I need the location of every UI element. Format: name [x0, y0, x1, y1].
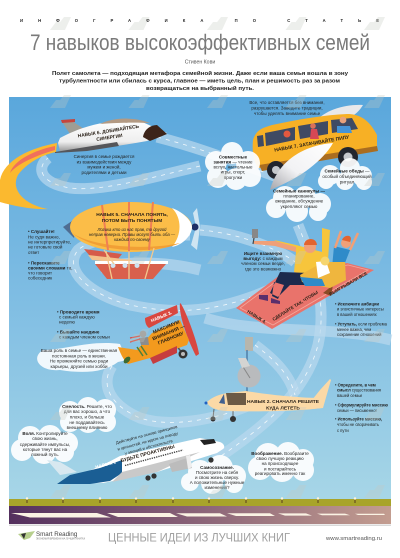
skill 4 bullets: и эгоистичные интересы	[337, 306, 384, 312]
skill 4 bullets: сохранение отношений	[337, 332, 381, 337]
grass strip	[9, 499, 391, 506]
lower wing	[150, 346, 177, 364]
listen text: • Слушайте!	[28, 228, 55, 234]
skill 2 bullets: смысл существования	[337, 388, 381, 392]
engine	[169, 457, 192, 472]
bus body	[253, 114, 377, 168]
cloud: family dinners: ритуал	[340, 180, 355, 184]
listen text: не готовьте свой	[28, 244, 63, 250]
gondola upper decks	[84, 249, 122, 259]
woman	[332, 246, 350, 268]
cloud: family dinners: Семейные обеды —	[324, 168, 370, 174]
airliner text: и ценностей, не идите на поводу	[117, 430, 179, 452]
ropes	[104, 248, 154, 279]
airliner labels	[95, 444, 183, 470]
carpet label	[246, 271, 368, 325]
carpet label: СДЕЛАЙТЕ ТАК, ЧТОБЫ	[272, 290, 319, 322]
skill 2 bullets: семьи — письменно!	[337, 408, 377, 413]
skill 2 bullets: с пути	[337, 428, 349, 433]
listen text: не интерпретируйте,	[28, 238, 71, 244]
runway edge	[9, 524, 391, 526]
biplane label: ВНИМАНИЯ —	[152, 324, 186, 342]
panel: sky	[9, 97, 391, 500]
upper wing swoosh	[315, 105, 363, 122]
passengers	[284, 130, 290, 138]
skill 4 bullets: менее важна, чем	[337, 327, 371, 332]
skill 2 bullets: • Используйте миссию,	[335, 416, 382, 422]
intro text	[52, 70, 349, 92]
airship label: ПОТОМ БЫТЬ ПОНЯТЫМ	[102, 218, 162, 224]
biplane label: НАВЫК 3.	[150, 310, 173, 323]
listen text: Не судя важно,	[28, 234, 60, 240]
belly	[112, 452, 200, 482]
intro text: турбулентности или сбилась с курса, главное — иметь цель, план и решимость раз за разом	[59, 77, 340, 84]
cloud: self-awareness: Самосознание.	[200, 465, 234, 470]
airliner text: у эмоций и обстоятельств	[124, 438, 173, 456]
airship text: Логика кто из нас прав, то другой	[96, 227, 167, 232]
skill 2 bullets: чтобы не сворачивать	[337, 422, 379, 427]
jet label	[77, 122, 141, 146]
listen text: ответ	[28, 250, 39, 255]
biplane label: ГЛАВНОМУ	[157, 330, 185, 346]
carpet label: НАВЫК 4.	[246, 309, 267, 325]
skill 6 text	[74, 154, 135, 175]
skill 4: carpet and family	[236, 228, 374, 329]
skill 2 bullets	[335, 382, 389, 433]
cloud: family dinners: особый объединяющий	[322, 173, 372, 179]
cloud: will: сдерживайте импульсы,	[20, 441, 70, 447]
fuselage	[118, 320, 189, 364]
footer logo	[18, 531, 86, 540]
gondola hull	[95, 261, 168, 264]
skill 3 bullets	[57, 310, 110, 340]
mutual benefit text	[241, 251, 285, 272]
cloud: self-awareness: А положительные нужные	[190, 480, 245, 485]
listen text: • Перескажите	[28, 260, 60, 266]
cloud: self-awareness: изменения?	[204, 485, 230, 490]
family role text	[41, 348, 118, 369]
cloud: family holidays: укрепляют семью	[281, 204, 318, 209]
canopy	[100, 119, 150, 124]
author: Стивен Кови	[185, 60, 215, 66]
biplane label	[149, 310, 188, 348]
mutual benefit text: выгоду: с каждым	[243, 256, 283, 261]
family role text: Ваша роль в семье — единственная	[41, 348, 118, 353]
cloud: imagination: свою лучшую реакцию	[256, 456, 304, 461]
airship label: НАВЫК 5. СНАЧАЛА ПОНЯТЬ,	[96, 212, 168, 218]
skill 6: jet	[0, 119, 167, 209]
bus label: НАВЫК 7. ЗАТАЧИВАЙТЕ ПИЛУ	[274, 132, 351, 154]
cloud: self-awareness	[181, 455, 246, 494]
footer slogan: ЦЕННЫЕ ИДЕИ ИЗ ЛУЧШИХ КНИГ	[108, 532, 291, 544]
skill 7 text	[249, 100, 325, 116]
tail	[62, 121, 84, 137]
cloud: family holidays	[266, 186, 331, 222]
cloud: joint activities: прогулки	[224, 175, 243, 180]
nose	[143, 125, 167, 141]
flight path roads	[42, 137, 391, 460]
cloud: self-awareness: Посмотрите на себя	[196, 470, 239, 475]
airship text: каждый по-своему	[114, 237, 151, 242]
skill 6 text: мужем и женой,	[87, 164, 121, 170]
skill 6 text: родителями и детьми	[81, 170, 127, 175]
footer logo: Smart Reading	[36, 531, 78, 538]
cloud: imagination: Воображение. Вообразите	[251, 450, 309, 456]
wing	[55, 142, 119, 153]
airliner labels: БУДЬТЕ ПРОАКТИВНЫ	[120, 444, 176, 464]
mutual benefit text: членом семьи везде,	[241, 261, 285, 266]
fuselage	[58, 120, 167, 151]
skill 6 text: из взаимодействия между	[77, 158, 132, 164]
mutual benefit text: где это возможно	[245, 266, 282, 272]
cloud: family holidays: ожидание, обсуждение	[275, 198, 324, 204]
wheels	[213, 409, 233, 418]
skill 7 text: чтобы уделять внимание семье	[254, 111, 321, 116]
skill 4 bullets	[335, 302, 388, 337]
skill 4 bullets: • Исключите амбиции	[335, 302, 379, 306]
skill 3: biplane	[118, 303, 199, 365]
cloud: will: свою жизнь,	[32, 436, 58, 441]
cloud: imagination: реагировать именно так	[255, 471, 305, 476]
airship text: неправ неверна. Правы могут быть оба —	[89, 232, 176, 237]
listen text: что говорит	[28, 270, 52, 276]
plane label: НАВЫК 2. СНАЧАЛА РЕШИТЕ	[247, 399, 320, 405]
skill 4 bullets: • Уступать, если проблема	[335, 322, 388, 326]
cloud: will: Воля. Контролируйте	[22, 430, 68, 436]
plane label: КУДА ЛЕТЕТЬ	[266, 406, 300, 412]
listen text: своими словами то,	[28, 266, 72, 270]
white trail	[37, 343, 127, 372]
listen text	[28, 228, 72, 280]
jet label: НАВЫК 6. ДОБИВАЙТЕСЬ	[77, 122, 140, 139]
cloud: joint activities: игры, спорт,	[221, 170, 245, 174]
flame	[0, 143, 57, 209]
cloud: courage: плохо, и больше	[70, 414, 105, 420]
cloud: family holidays: Семейные каникулы —	[273, 188, 325, 194]
cloud: imagination	[248, 442, 314, 482]
fuselage	[207, 391, 322, 411]
skill 7 text: Все, что оставляется без внимания,	[249, 100, 325, 105]
jet label: СИНЕРГИИ	[96, 133, 124, 143]
family role text: постоянная роль в жизни.	[52, 354, 106, 358]
dish antenna	[245, 337, 253, 351]
cloud: imagination: и постарайтесь	[264, 466, 297, 472]
tail fin	[47, 460, 77, 475]
cloud: family holidays: планирование,	[283, 194, 315, 198]
cloud: courage: не поддавайтесь	[69, 419, 105, 425]
airliner labels: НАВЫК 1	[95, 459, 117, 470]
skill 2 bullets: вашей семьи	[337, 393, 362, 398]
windows	[257, 118, 358, 147]
cockpit	[200, 439, 216, 445]
child and pillow	[300, 262, 346, 288]
cloud: courage: для вас хорошо, а что	[64, 409, 111, 414]
cloud: joint activities: вслух, настольные	[213, 164, 253, 170]
landing gear	[145, 475, 151, 481]
envelope	[70, 202, 192, 252]
skill 5: airship	[63, 202, 200, 279]
family role text: карьеры, друзей или хобби	[50, 363, 108, 369]
skill 4 bullets: в вашей отношениях	[337, 312, 377, 317]
plane label	[247, 399, 320, 412]
skill 1: airliner	[47, 424, 224, 484]
runway lamps	[26, 497, 356, 503]
skill 6 text: Синергия в семье рождается	[74, 154, 135, 159]
cloud: family dinners	[318, 158, 372, 190]
cloud: imagination: на происходящее	[262, 461, 299, 466]
skill 2 bullets: • Определите, в чем	[335, 382, 376, 388]
wheel	[176, 345, 183, 354]
skill 2 bullets: • Сформулируйте миссию	[335, 402, 389, 408]
propeller	[180, 303, 199, 356]
airship text	[89, 227, 176, 242]
cloud: self-awareness: и свою жизнь сверху.	[195, 475, 239, 480]
skill 3 bullets: с семьей каждую	[59, 314, 95, 320]
carpet	[236, 263, 374, 329]
cloud: joint activities: Совместные	[219, 154, 248, 160]
cloud: courage: Смелость. Решите, что	[62, 404, 112, 409]
carpet label: ВЫИГРЫВАЛИ ВСЕ	[328, 271, 368, 297]
cloud: joint activities	[205, 142, 261, 190]
cloud: joint activities: занятия — чтение	[214, 160, 253, 164]
airship label	[96, 212, 168, 224]
airliner text: Действуйте на основе принципов	[115, 424, 178, 445]
wheels	[267, 161, 285, 179]
footer url: www.smartreading.ru	[325, 536, 382, 542]
skill 3 bullets: • Бывайте наедине	[57, 328, 100, 334]
top wing	[145, 305, 178, 328]
airliner text	[115, 424, 179, 456]
skill 3 bullets: неделю	[59, 320, 75, 324]
fin and nose	[63, 217, 78, 238]
cloud: will: ложный путь.	[31, 451, 59, 457]
footer logo: ЭКОНОМИЯ ВРЕМЕНИ НА ЛУЧШИХ КНИГАХ	[36, 538, 86, 540]
skill 7 text: разрушается. Заведите традиции,	[251, 106, 323, 110]
cloud: will	[11, 425, 78, 464]
mutual benefit text: Ищите взаимную	[244, 251, 282, 256]
fuselage	[57, 438, 224, 484]
intro text: возвращаться на выбранный путь.	[146, 85, 254, 92]
biplane label: МАКСИМУМ	[152, 319, 181, 336]
big wing swoosh	[270, 143, 333, 190]
skill 7: bus	[253, 114, 378, 179]
listen text: собеседник	[28, 276, 52, 280]
cloud: courage	[59, 397, 116, 433]
cloud: courage: внешнему влиянию	[67, 425, 108, 430]
intro text: Полет самолета — подходящая метафора семейной жизни. Даже если ваша семья вошла в зону	[52, 70, 349, 77]
skill 3 bullets: с каждым членом семьи	[59, 334, 110, 340]
man	[274, 228, 330, 276]
header label: ИНФОГРАФИКА ПО СТАТЬЕ	[20, 18, 379, 23]
runway	[9, 506, 391, 524]
cloud: will: которые тянут вас на	[23, 447, 68, 452]
tail	[300, 379, 331, 410]
skill 3 bullets: • Проводите время	[57, 310, 100, 314]
skill 2: light plane	[204, 337, 331, 422]
family role text: Не променяйте семью ради	[50, 358, 109, 364]
pilot	[140, 331, 146, 337]
